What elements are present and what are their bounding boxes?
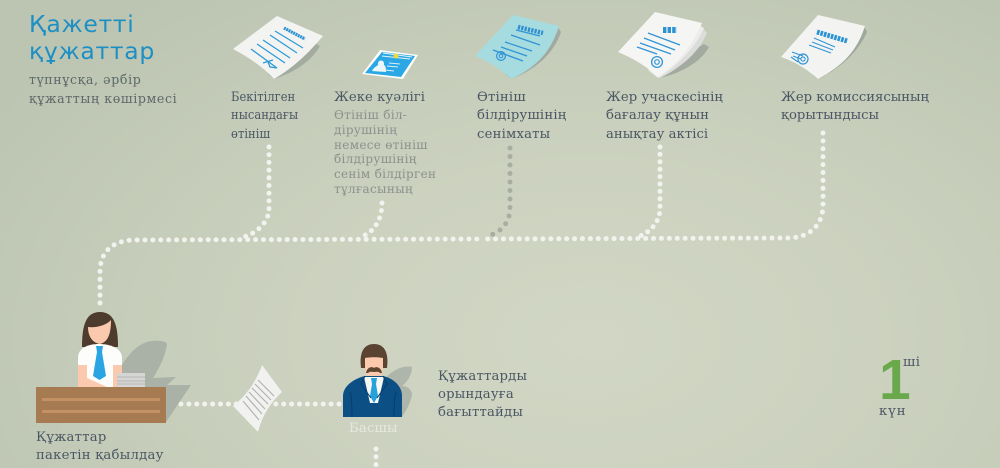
note: identity card applicant: Өтініш біл-: [334, 108, 407, 122]
note: identity card applicant: [334, 108, 436, 196]
subtitle: түпнұсқа, әрбір: [29, 72, 141, 87]
superscript: ші: [903, 355, 920, 370]
dotted line: desk to manager: [181, 402, 340, 406]
dotted line: branch from valuation act: [635, 147, 660, 238]
label: identity card: Жеке куәлігі: [334, 90, 425, 105]
illustration: manager: [343, 344, 412, 417]
label: valuation act: Жер учаскесінің: [606, 90, 723, 105]
subtitle: [29, 72, 177, 106]
label: valuation act: анықтау актісі: [606, 127, 708, 142]
subtitle: құжаттың көшірмесі: [29, 90, 177, 106]
note: identity card applicant: немесе өтініш: [334, 138, 428, 152]
label: manager: Басшы: [349, 421, 398, 436]
label: directs documents: [438, 369, 527, 420]
dotted line: main route left part: [100, 239, 480, 303]
label: power of attorney: Өтініш: [477, 90, 526, 105]
label: power of attorney: білдірушінің: [477, 108, 566, 123]
note: identity card applicant: дірушінің: [334, 123, 397, 137]
dotted line: branch from application form: [243, 147, 269, 237]
label: valuation act: [606, 90, 723, 142]
label: land commission conclusion: қорытындысы: [781, 108, 879, 123]
label: power of attorney: сенімхаты: [477, 127, 550, 142]
label: power of attorney: [477, 90, 566, 142]
note: identity card applicant: тұлғасының: [334, 182, 413, 196]
label: approved-form application: нысандағы: [231, 108, 298, 123]
number one: 1: [879, 348, 911, 412]
icon: valuation act document stack: [618, 12, 709, 78]
illustration: receptionist at desk: [36, 312, 191, 423]
icon: land commission conclusion document: [781, 15, 867, 79]
label: approved-form application: өтініш: [231, 127, 270, 142]
dotted line: main route right part: [480, 133, 823, 239]
label: receive documents package: пакетін қабылдау: [36, 448, 164, 463]
dotted line: continuing down from manager: [374, 449, 378, 468]
label: directs documents: Құжаттарды: [438, 369, 527, 384]
day counter: [879, 348, 920, 419]
dotted line: grey optional branch from power of attorney: [491, 148, 510, 235]
icon: power of attorney document: [475, 15, 561, 79]
title: Қажетті: [29, 10, 135, 38]
note: identity card applicant: сенім білдірген: [334, 167, 436, 181]
icon: passing document: [233, 365, 282, 432]
label: land commission conclusion: Жер комиссиясының: [781, 90, 929, 105]
label: valuation act: бағалау құнын: [606, 108, 709, 123]
label: land commission conclusion: [781, 90, 929, 123]
label: receive documents package: Құжаттар: [36, 430, 107, 445]
title: [29, 10, 155, 65]
day word: күн: [879, 404, 906, 419]
icon: application form document: [233, 16, 323, 79]
label: directs documents: бағыттайды: [438, 405, 523, 420]
note: identity card applicant: білдірушінің: [334, 152, 417, 166]
label: approved-form application: Бекітілген: [231, 90, 295, 105]
label: directs documents: орындауға: [438, 387, 514, 402]
title: құжаттар: [29, 37, 155, 65]
dotted line: branch from identity card: [361, 203, 382, 237]
icon: identity card: [362, 50, 418, 79]
label: receive documents package: [36, 430, 164, 463]
label: approved-form application: [231, 90, 298, 142]
